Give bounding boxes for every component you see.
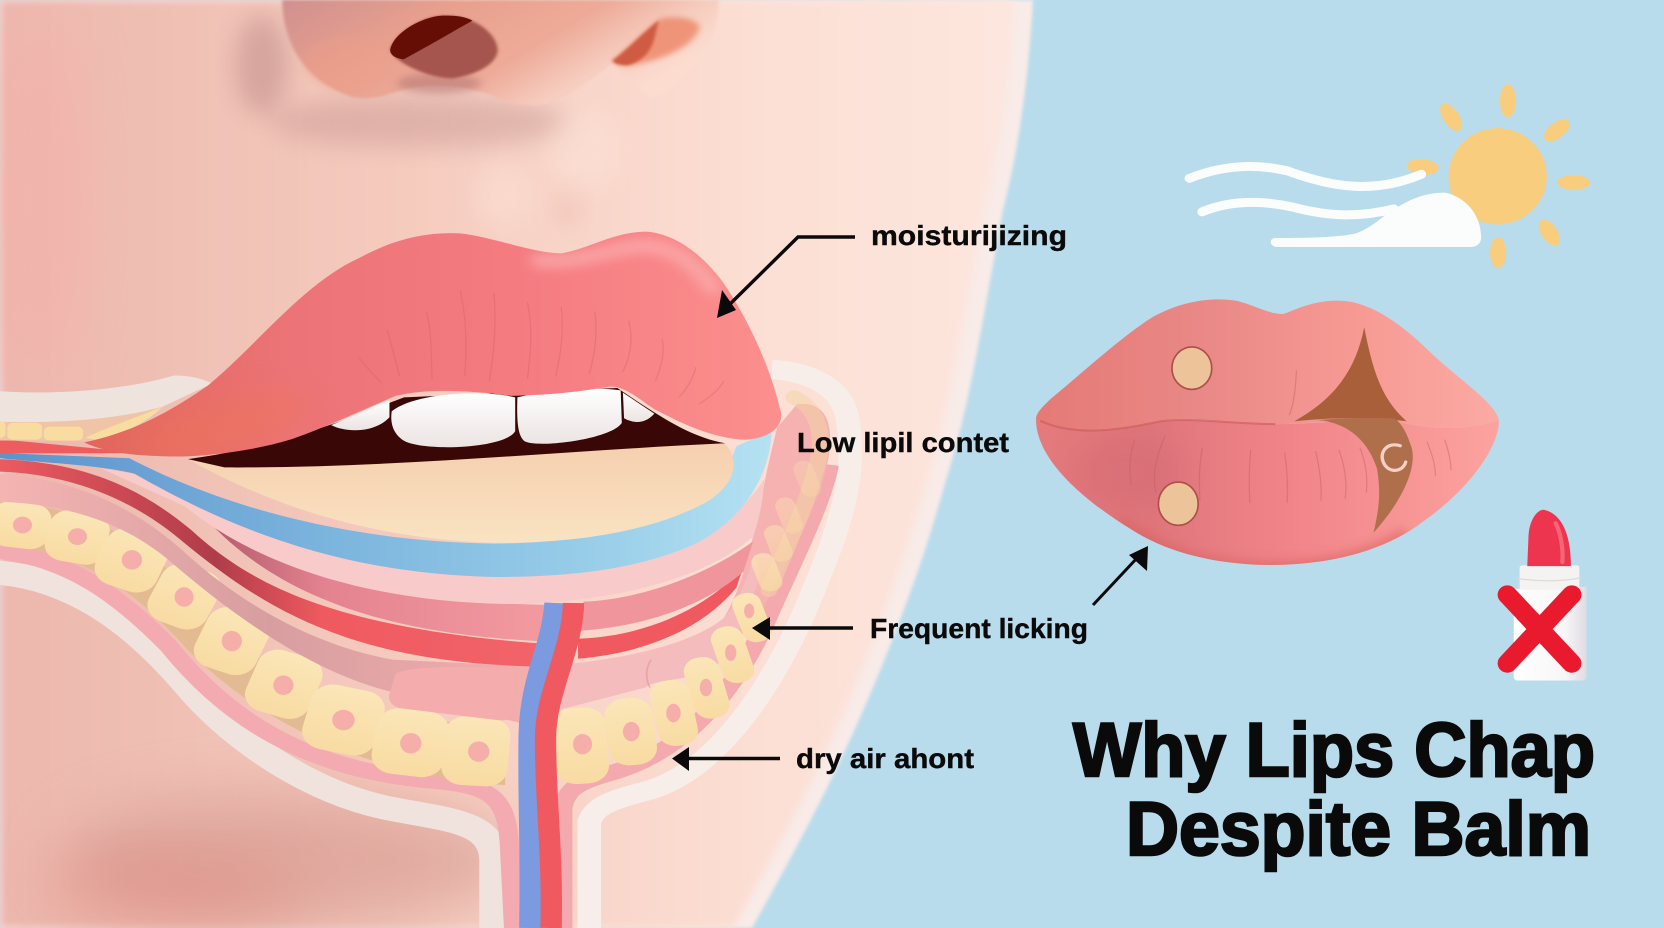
lip creases [1130, 370, 1451, 503]
cloud [1271, 193, 1481, 247]
upper lip [84, 232, 781, 476]
lower pink layer [0, 465, 829, 928]
label: moisturizing: moisturijizing [871, 220, 1067, 251]
arrow: dry air [672, 747, 780, 771]
right corner tissue [556, 397, 830, 711]
red muscle layer [0, 459, 744, 667]
crack upper [1294, 327, 1407, 421]
icon: crossed-out lip balm [1507, 510, 1587, 680]
crack lower [1318, 418, 1413, 533]
blue layer [0, 431, 772, 577]
blister upper [1172, 347, 1212, 389]
blood vessels [530, 603, 574, 928]
label: dry air: dry air ahont [796, 743, 974, 774]
rose layer [208, 520, 753, 641]
pale pink layer [101, 468, 764, 604]
illustration: chapped lips [1036, 299, 1499, 568]
outer skin layer [0, 369, 850, 928]
label: frequent licking: Frequent licking [870, 613, 1088, 644]
upper left skin and cells [0, 376, 212, 441]
mouth cavity [188, 388, 725, 467]
chart: lip cross-section anatomy [0, 232, 850, 928]
lower lip [1036, 419, 1499, 565]
icon: nose [282, 0, 719, 105]
arrow: to chapped lips [1093, 546, 1148, 605]
title: Despite Balm [1126, 787, 1591, 872]
upper lip [1036, 299, 1499, 430]
crack highlight [1382, 445, 1406, 470]
thin red strip [0, 439, 143, 454]
tongue [188, 442, 734, 543]
arrow: to upper lip [717, 237, 855, 318]
label: low lipid content: Low lipil contet [797, 427, 1009, 458]
title [1073, 708, 1595, 872]
blister lower [1158, 482, 1198, 525]
fat cells [0, 459, 824, 788]
icon: sun and wind [1189, 84, 1590, 268]
teeth [331, 389, 654, 447]
sun disc and rays [1406, 84, 1590, 268]
panel: face [0, 0, 1033, 928]
title: Why Lips Chap [1073, 708, 1595, 793]
pink dermis band [0, 474, 539, 725]
lower lip shading [1072, 436, 1407, 568]
tan backing behind cells [0, 502, 505, 785]
dermis block [389, 667, 516, 720]
arrow: frequent licking [752, 617, 853, 640]
wind lines [1189, 167, 1421, 215]
